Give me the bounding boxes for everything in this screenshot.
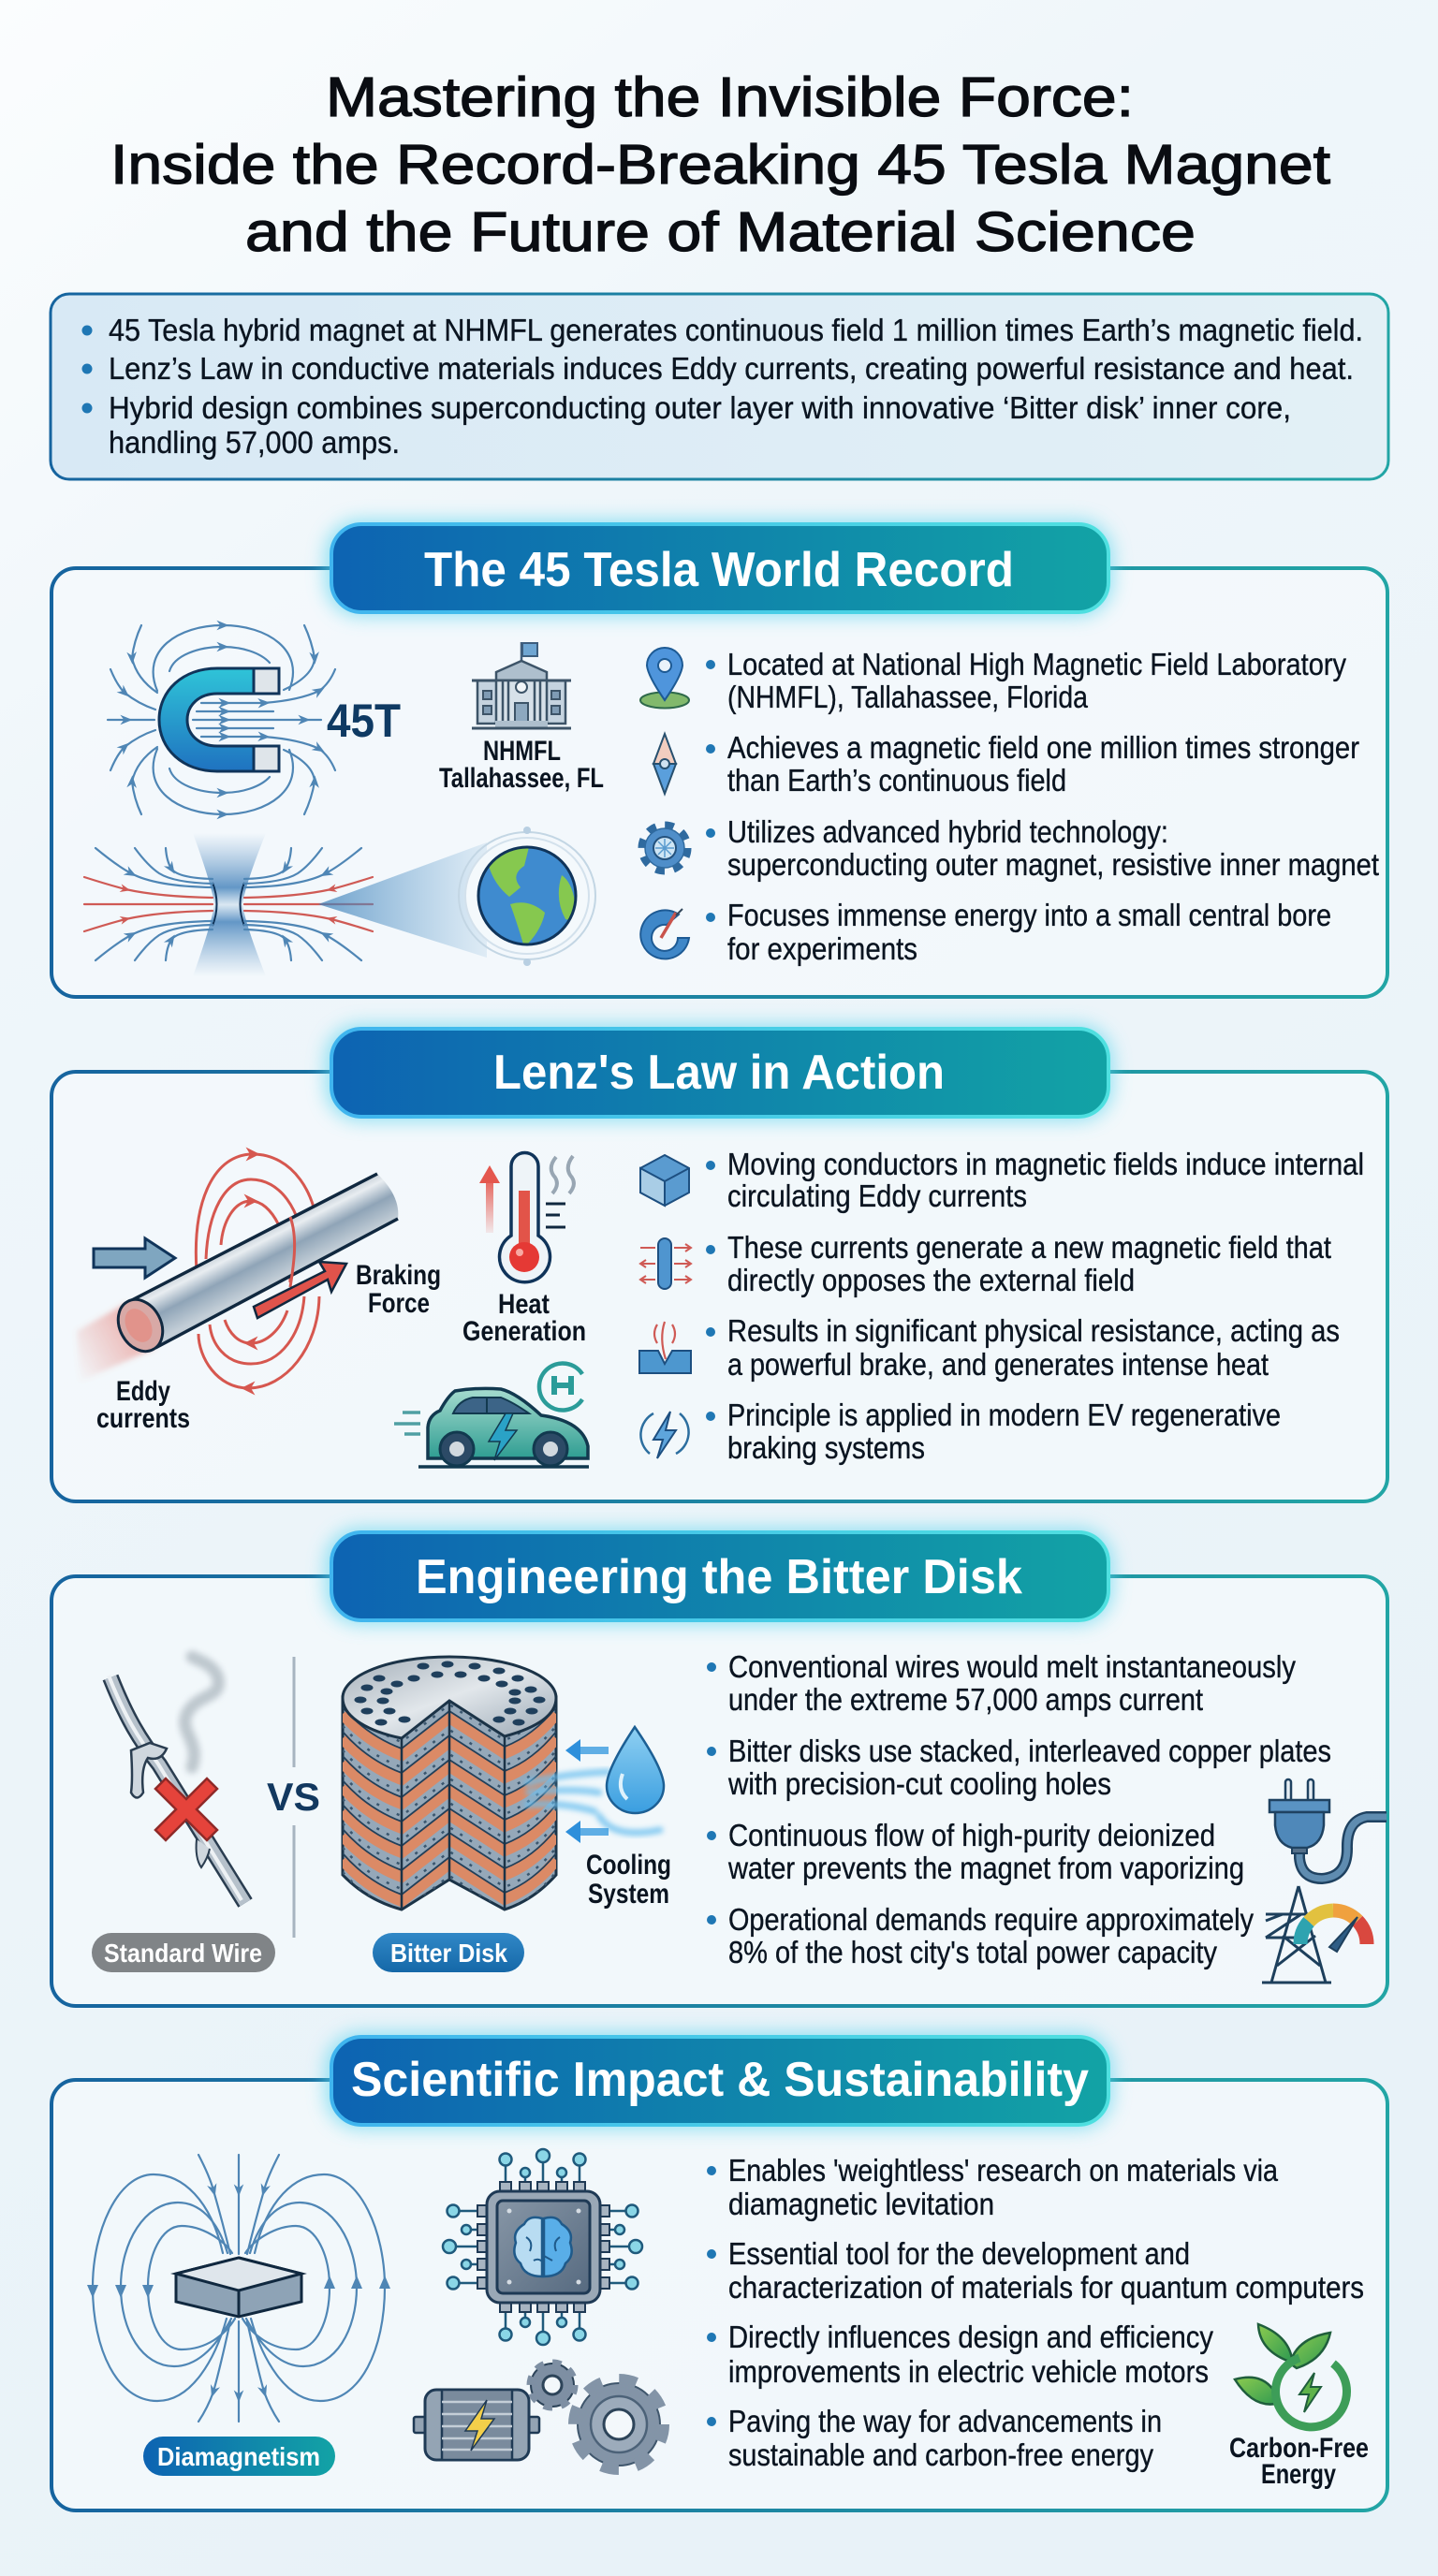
bullet: eddy currents: circulating Eddy currents: [727, 1178, 1027, 1213]
bullet: stacked plates: Bitter disks use stacked, interleaved copper plates: [728, 1734, 1331, 1768]
bullet: regenerative braking: braking systems: [727, 1430, 925, 1465]
label: Braking Force: Force: [368, 1288, 430, 1319]
bullet: carbon-free energy: [707, 2404, 1162, 2472]
bullet: deionized water: water prevents the magnet from vaporizing: [727, 1851, 1244, 1885]
label: Cooling System: Cooling: [586, 1850, 671, 1881]
icon: electric car: [394, 1363, 589, 1467]
bullet: quantum computers: characterization of materials for quantum computers: [728, 2270, 1364, 2305]
bullet: one million times: than Earth’s continuous field: [727, 763, 1066, 798]
bullet: opposing field: directly opposes the external field: [727, 1263, 1135, 1297]
bullet: quantum computers: [707, 2236, 1364, 2305]
diagram: diamagnetism field lines: [87, 2155, 390, 2422]
bullet: location: (NHMFL), Tallahassee, Florida: [727, 680, 1089, 714]
icon: map pin: [640, 648, 689, 708]
bullet: ev motors: [707, 2320, 1213, 2389]
label: NHMFL Tallahassee: [439, 736, 604, 794]
bullet: hybrid technology: [642, 814, 1379, 882]
bullet: regenerative braking: Principle is applied in modern EV regenerative: [727, 1398, 1281, 1432]
badge: Bitter Disk: Bitter Disk: [390, 1939, 507, 1968]
bullet: regenerative braking: [640, 1398, 1281, 1465]
heading: Lenz's Law in Action: Lenz's Law in Action: [493, 1046, 945, 1100]
icon: horseshoe magnet with field lines: [108, 625, 335, 814]
icon: ai chip: [443, 2149, 642, 2345]
label: 45T: 45T: [327, 695, 401, 747]
badge: Diamagnetism: Diamagnetism: [157, 2442, 320, 2471]
panel: lenz's law in action: [51, 1025, 1387, 1501]
bullet: eddy currents: Moving conductors in magnetic fields induce internal: [727, 1147, 1364, 1181]
panel: scientific impact and sustainability: [51, 2033, 1387, 2510]
badge: Bitter Disk: [373, 1933, 524, 1972]
icon: pylon and power gauge: [1262, 1886, 1367, 1983]
icon: thermometer: [479, 1153, 574, 1282]
heading: 45 Tesla World Record: The 45 Tesla World Record: [424, 543, 1014, 597]
title: Inside the Record-Breaking 45 Tesla Magnet: [110, 134, 1330, 196]
bullet: opposing field: These currents generate a new magnetic field that: [727, 1230, 1331, 1265]
icon: earth: [459, 827, 595, 966]
bullet: location: [640, 647, 1346, 714]
icon: cooling water flow: [527, 1727, 664, 1843]
bullet: weightless research: Enables 'weightless' research on materials via: [728, 2153, 1279, 2188]
bullet: quantum computers: Essential tool for the development and: [728, 2236, 1190, 2271]
diagram: conductor with eddy currents: [77, 1154, 398, 1388]
panel: summary: handling 57,000 amps.: [109, 425, 400, 460]
label: Carbon-Free Energy: [1229, 2433, 1369, 2490]
label: Braking Force: Braking: [356, 1260, 441, 1291]
label: Cooling System: System: [588, 1879, 669, 1910]
arrow: braking force: [254, 1262, 346, 1318]
diagram: focused field hourglass: [84, 833, 487, 976]
icon: bolt with cycle arrows: [640, 1412, 689, 1458]
panel: summary: 45 Tesla hybrid magnet at NHMFL generates continuous field 1 million times Earth’s magnetic field.: [109, 313, 1363, 347]
bullet: power capacity: Operational demands require approximately: [728, 1902, 1254, 1937]
bullet: opposing field: [640, 1230, 1331, 1297]
icon: gear: [642, 826, 687, 871]
heading: 45 Tesla World Record: [326, 520, 1112, 616]
label: NHMFL Tallahassee: NHMFL: [483, 736, 561, 767]
bullet: power capacity: [707, 1902, 1254, 1969]
bullet: weightless research: diamagnetic levitation: [728, 2187, 994, 2221]
icon: power plug: [1269, 1779, 1387, 1879]
panel: engineering the bitter disk: [51, 1529, 1387, 2006]
bullet: one million times: Achieves a magnetic field one million times stronger: [727, 730, 1359, 765]
heading: Scientific Impact & Sustainability: [326, 2033, 1112, 2129]
icon: compass needle: [653, 734, 676, 794]
bullet: conventional wires: [707, 1649, 1296, 1717]
bullet: weightless research: [707, 2153, 1279, 2221]
bullet: location: Located at National High Magnetic Field Laboratory: [727, 647, 1346, 681]
bullet: braking and heat: [639, 1313, 1340, 1382]
label: Heat Generation: [462, 1289, 586, 1347]
badge: Standard Wire: [92, 1933, 275, 1972]
panel: summary: [51, 294, 1388, 479]
heading: Engineering the Bitter Disk: [326, 1529, 1112, 1624]
bullet: stacked plates: [707, 1734, 1331, 1801]
bullet: conventional wires: Conventional wires would melt instantaneously: [728, 1649, 1296, 1684]
bullet: power capacity: 8% of the host city's total power capacity: [728, 1935, 1217, 1969]
divider and vs: VS: [267, 1775, 320, 1819]
bullet: central bore: Focuses immense energy into a small central bore: [727, 898, 1331, 932]
label: Heat Generation: Generation: [462, 1316, 586, 1347]
bullet: ev motors: Directly influences design and efficiency: [728, 2320, 1213, 2354]
label: Eddy currents: currents: [96, 1403, 190, 1434]
bullet: ev motors: improvements in electric vehicle motors: [728, 2354, 1209, 2389]
bullet: deionized water: [707, 1818, 1244, 1885]
bullet: braking and heat: Results in significant physical resistance, acting as: [727, 1313, 1340, 1348]
bullet: deionized water: Continuous flow of high-purity deionized: [728, 1818, 1215, 1852]
bullet: one million times: [653, 730, 1359, 798]
icon: electric motor: [414, 2390, 539, 2460]
label: Eddy currents: [96, 1376, 190, 1434]
heading: Engineering the Bitter Disk: Engineering the Bitter Disk: [416, 1550, 1022, 1604]
diagram: bitter disk stack: [343, 1657, 556, 1913]
label: Braking Force: [356, 1260, 441, 1319]
arrow: motion: [94, 1238, 175, 1278]
title: Mastering the Invisible Force:: [326, 66, 1134, 128]
heading: Lenz's Law in Action: [326, 1025, 1112, 1120]
badge: Standard Wire: Standard Wire: [104, 1939, 262, 1968]
title: [110, 66, 1330, 263]
bullet: eddy currents: [640, 1147, 1364, 1213]
bullet: carbon-free energy: Paving the way for advancements in: [728, 2404, 1162, 2438]
bullet: central bore: [640, 898, 1331, 966]
label: Carbon-Free Energy: Energy: [1261, 2459, 1336, 2490]
badge: Diamagnetism: [143, 2437, 335, 2476]
icon: rod with opposing arrows: [640, 1238, 691, 1289]
label: NHMFL Tallahassee: Tallahassee, FL: [439, 763, 604, 794]
icon: carbon-free leaf: [1235, 2324, 1347, 2427]
label: Cooling System: [586, 1850, 671, 1910]
heading: Scientific Impact & Sustainability: Scientific Impact & Sustainability: [351, 2053, 1089, 2107]
label: Heat Generation: Heat: [498, 1289, 550, 1320]
panel: the 45 tesla world record: [51, 520, 1387, 997]
panel: summary: Lenz’s Law in conductive materials induces Eddy currents, creating powerful resistance and heat.: [109, 351, 1354, 386]
bullet: stacked plates: with precision-cut cooling holes: [727, 1766, 1111, 1801]
panel: summary: Hybrid design combines superconducting outer layer with innovative ‘Bitter disk’ inner core,: [109, 390, 1291, 425]
icon: heated block: [639, 1322, 691, 1373]
icon: metal cube: [640, 1155, 689, 1206]
bullet: conventional wires: under the extreme 57,000 amps current: [728, 1682, 1203, 1717]
title: and the Future of Material Science: [245, 201, 1196, 263]
bullet: carbon-free energy: sustainable and carbon-free energy: [728, 2437, 1153, 2472]
icon: target magnet: [640, 909, 689, 959]
bullet: central bore: for experiments: [727, 931, 917, 966]
icon: gears: [531, 2364, 663, 2468]
label: Eddy currents: Eddy: [116, 1376, 170, 1407]
label: Carbon-Free Energy: Carbon-Free: [1229, 2433, 1369, 2464]
bullet: hybrid technology: Utilizes advanced hybrid technology:: [727, 814, 1168, 849]
bullet: braking and heat: a powerful brake, and generates intense heat: [727, 1347, 1269, 1382]
icon: laboratory building: [472, 642, 571, 728]
icon: melting standard wire: [109, 1657, 245, 1903]
